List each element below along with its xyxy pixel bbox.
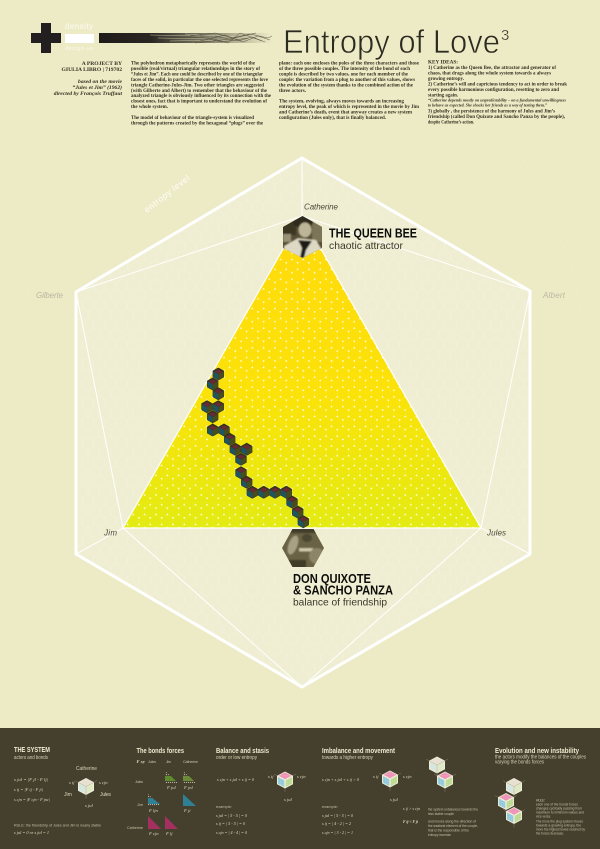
footer panel: the system: s ij [69, 780, 75, 785]
name: Jim: Jim [103, 528, 117, 538]
intro text column 2: plane: each one encloses the poles of the three characters and those [279, 60, 419, 66]
hexagon plug path [201, 368, 309, 528]
footer panel: the system: s jul = 0 or s jul = 1 [14, 830, 49, 835]
footer panel: imbalance and movement: s ij > s cjn [403, 806, 421, 811]
footer panel: imbalance and movement: that is the responsible of the [428, 828, 469, 832]
intro text column 1: The polyhedron metaphorically represents the world of the [131, 60, 255, 66]
credits block: directed by François Truffaut [54, 91, 122, 97]
footer panel: the bonds forces: Jim [166, 760, 171, 764]
footer panel: evolution and new instability: the actors modify the balances of the couples [495, 754, 586, 760]
footer panel: imbalance and movement: s jul = | 5 - 5 | = 0 [322, 813, 354, 818]
footer panel: imbalance and movement: s ij [373, 774, 379, 779]
footer panel: evolution and new instability [495, 746, 586, 836]
footer panel: the system: actors and bonds [14, 755, 48, 761]
footer panel: evolution and new instability: the forces decrease. [536, 832, 564, 836]
footer panel: imbalance and movement: s cjn = | 3 - 2 | = 1 [322, 830, 353, 835]
name: Jules: Jules [486, 528, 506, 538]
footer panel: the system: Jim [64, 792, 72, 798]
footer panel: the system: THE SYSTEM [14, 745, 50, 754]
intro text column 1: faces of the solid, in particular the one selected represents the love [131, 77, 268, 83]
footer panel: evolution and new instability: RULE: [536, 798, 545, 802]
footer panel: the bonds forces: F cjn [148, 831, 159, 836]
intro text column 1: “Jules et Jim”. Each one could be described by one of the triangular [131, 71, 263, 77]
heading: Don Quixote and Sancho Panza: & SANCHO PANZA [293, 582, 394, 598]
footer panel: evolution and new instability: maximum to minimum values and [536, 810, 584, 814]
credits block [54, 61, 123, 97]
credits block: GIULIA LIBRO | 719702 [62, 67, 122, 73]
intro text column 1: triangle Catherine-Jules-Jim. Two other triangles are suggested [131, 82, 265, 88]
key ideas column: KEY IDEAS: [428, 60, 458, 66]
key ideas column: despite Catherine’s action. [428, 120, 474, 126]
name: Catherine: Catherine [304, 202, 339, 212]
key ideas column: growing entropy. [428, 76, 465, 82]
footer panel: the system: Jules [100, 792, 111, 798]
footer panel: the system: s cjn = |F cjn - F jnc| [14, 797, 50, 802]
heading: the queen bee: THE QUEEN BEE [329, 226, 417, 241]
intro text column 2: couple is described by two values, one for each member of the [279, 71, 408, 77]
footer panel: the bonds forces: F jul [166, 785, 177, 790]
photo: Don Quixote hexagon [282, 529, 324, 567]
outer dotted entropy ring [20, 60, 584, 330]
key ideas column: every possible harmonious configuration, resetting to zero and [428, 87, 560, 93]
footer panel: imbalance and movement: the system unbalances towards the [428, 808, 478, 812]
header density scale [65, 22, 94, 52]
intro text column 2: of the three possible couples. The intensity of the bond of each [279, 66, 411, 72]
footer panel: imbalance and movement: s jul [390, 797, 399, 802]
credits block: A PROJECT BY [82, 61, 122, 67]
name: Albert: Albert [542, 291, 566, 300]
footer panel: evolution and new instability: more the highest levels reached by [536, 828, 585, 832]
footer panel: imbalance and movement: s cjn [403, 774, 412, 779]
footer panel: the system [14, 745, 111, 835]
footer panel: the bonds forces: F xy [136, 759, 146, 764]
heading: the queen bee [329, 226, 417, 252]
footer panel: the bonds forces [127, 746, 198, 836]
footer panel: balance and stasis: example: [216, 805, 232, 809]
heading: Don Quixote and Sancho Panza: balance of friendship [293, 597, 387, 609]
heading: the queen bee: chaotic attractor [329, 240, 403, 252]
footer panel: imbalance and movement: Imbalance and movement [322, 746, 395, 755]
header density scale: design.us [65, 46, 93, 52]
footer panel: evolution and new instability: towards a growing entropy, the [536, 824, 581, 828]
footer panel: the bonds forces: The bonds forces [136, 746, 184, 755]
heading: Don Quixote and Sancho Panza: DON QUIXOTE [293, 571, 371, 586]
footer panel: evolution and new instability: Evolution and new instability [495, 746, 580, 755]
credits block: “Jules et Jim” (1962) [72, 84, 122, 91]
footer panel: the bonds forces: F lj [165, 831, 173, 836]
polyhedron: outer hexagon [76, 158, 530, 687]
intro text column 2: three actors. [279, 88, 307, 94]
intro text column 2: and Catherine’s death, event that anyway creates a new system [279, 110, 412, 116]
footer panel: imbalance and movement: and moves along the direction of [428, 820, 477, 824]
intro text column 1: the whole system. [131, 104, 169, 110]
footer panel: balance and stasis: Balance and stasis [216, 746, 269, 755]
footer panel: the bonds forces: F jnl [183, 785, 194, 790]
footer band [0, 728, 600, 849]
intro text column 2: couple: the variation from a plug to another of this values, shows [279, 77, 416, 83]
key ideas column: “Catherine depends mostly on unpredictability – on a fundamental unwillingness [428, 98, 566, 102]
key ideas column: friendship (called Don Quixote and Sancho Panza by the people), [428, 113, 566, 120]
footer panel: imbalance and movement [322, 746, 478, 837]
footer panel: imbalance and movement: entropy increase [428, 833, 451, 837]
credits block: based on the movie [78, 79, 123, 85]
footer panel: the bonds forces: Catherine [183, 760, 198, 764]
intro text column 1: possible (real/virtual) triangular relationships in the story of [131, 65, 260, 72]
footer panel: balance and stasis: s ij [268, 774, 274, 779]
title: Entropy of Love [283, 24, 500, 61]
name: Gilberte: Gilberte [36, 291, 64, 300]
footer panel: the system: s jul = |F jl - F lj| [14, 777, 48, 782]
footer panel: evolution and new instability: varying the bonds forces [495, 760, 544, 766]
photo: Catherine hexagon [283, 216, 322, 258]
intro text column 1: closest ones, fact that is important to understand the evolution of [131, 99, 267, 105]
intro text column 2: the evolution of the system thanks to the combined action of the [279, 82, 413, 88]
footer panel: imbalance and movement: s cjn + s jul + s ij > 0 [322, 777, 360, 782]
intro text column 2 [279, 60, 419, 121]
footer panel: balance and stasis [216, 746, 306, 835]
footer panel: the system: RULE: the friendship of Jules and Jim is nearly stable [14, 824, 101, 828]
footer panel: balance and stasis: s cjn + s jul + s ij = 0 [217, 777, 255, 782]
footer panel: imbalance and movement: example: [322, 805, 338, 809]
footer panel: the bonds forces: Jim [137, 803, 143, 807]
intro text column 2: entropy level, the peak of which is represented in the movie by Jim [279, 104, 419, 110]
footer panel: balance and stasis: s jul [284, 797, 293, 802]
key ideas column: to behave as expected. She shocks her friends as a way of testing them.” [428, 103, 548, 108]
intro text column 1: analyzed triangle is obviously influenced by its connection with the [131, 93, 271, 99]
footer panel: evolution and new instability: each one of the bonds forces [536, 802, 578, 806]
title: 3 [501, 27, 509, 44]
intro text column 1: (with Gilberte and Albert) to remember that the behaviour of the [131, 87, 267, 94]
footer panel: the system: Catherine [76, 766, 97, 772]
footer panel: evolution and new instability: The more the plug system moves [536, 820, 583, 824]
key ideas column [428, 60, 568, 126]
footer panel: the bonds forces: Jules [135, 780, 143, 784]
footer panel: the bonds forces: Catherine [127, 826, 143, 830]
key ideas column: 3) globally , the persistence of the harmony of Jules and Jim’s [428, 108, 556, 115]
heading: Don Quixote and Sancho Panza [293, 571, 394, 609]
footer panel: imbalance and movement: towards a higher entropy [322, 755, 373, 761]
footer panel: imbalance and movement: the weakest element of the couple, [428, 824, 478, 828]
footer panel: imbalance and movement: F ij < F ji [403, 819, 419, 824]
key ideas column: 2) Catherine’s will and capricious tendency to act in order to break [428, 81, 568, 88]
footer panel: balance and stasis: s cjn [297, 774, 306, 779]
intro text column 1: through the patterns created by the hexagonal “plugs” over the [131, 120, 263, 126]
footer panel: evolution and new instability: changes cyclically passing from [536, 806, 582, 810]
footer panel: balance and stasis: s ij = | 5 - 5 | = 0 [216, 821, 246, 826]
key ideas column: chaos, that drags along the whole system towards a always [428, 71, 552, 77]
header density scale: density [65, 22, 93, 31]
footer panel: the system: s ij = |F ij - F ji| [14, 787, 43, 792]
intro text column 1 [131, 60, 271, 126]
entropy level label: entropy level [142, 173, 192, 215]
header entropy bar [99, 33, 272, 43]
footer panel: imbalance and movement: less stable couple [428, 812, 454, 816]
yellow triangle Catherine Jules Jim [123, 216, 481, 528]
intro text column 2: The system, evolving, always moves towards an increasing [279, 99, 404, 105]
footer panel: balance and stasis: s cjn = | 4 - 4 | = 0 [216, 830, 248, 835]
footer panel: the bonds forces: Jules [148, 760, 156, 764]
footer panel: the system: s cjn [99, 780, 108, 785]
footer panel: the system: s jul [85, 803, 94, 808]
footer panel: the bonds forces: F ji [183, 808, 191, 813]
key ideas column: 1) Catherine as the Queen Bee, the attractor and generator of [428, 64, 556, 71]
footer panel: the bonds forces: F ljn [148, 808, 159, 813]
footer panel: imbalance and movement: s ij = | 4 - 2 | = 2 [322, 821, 352, 826]
key ideas column: starting again. [428, 93, 459, 99]
header logo: plus sign [31, 23, 61, 53]
intro text column 1: The model of behaviour of the triangle-system is visualized [131, 115, 255, 121]
footer panel: balance and stasis: order or low entropy [216, 755, 257, 761]
footer panel: evolution and new instability: vice versa. [536, 814, 551, 818]
intro text column 2: configuration (Jules only), that is finally balanced. [279, 114, 387, 121]
footer panel: balance and stasis: s jul = | 5 - 5 | = 0 [216, 813, 248, 818]
